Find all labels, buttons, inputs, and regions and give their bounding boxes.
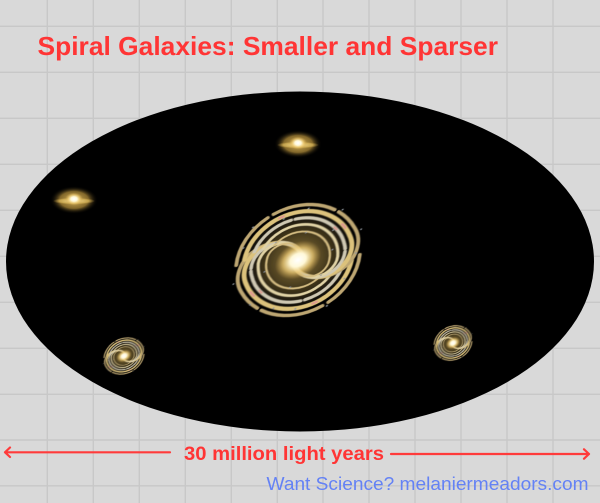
credit text: Want Science? melaniermeadors.com (266, 474, 588, 494)
scale label: 30 million light years (184, 443, 384, 465)
arrow: scale left (5, 448, 170, 457)
icon: small spiral galaxy left (96, 330, 153, 383)
panel: black elliptical region of space (6, 92, 594, 432)
arrow: scale right (391, 449, 589, 459)
icon: edge-on galaxy left (50, 186, 98, 214)
icon: edge-on galaxy top (274, 130, 322, 158)
icon: small spiral galaxy right (427, 318, 480, 368)
title: Spiral Galaxies: Smaller and Sparser (38, 31, 498, 61)
icon: large central spiral galaxy (212, 180, 387, 342)
